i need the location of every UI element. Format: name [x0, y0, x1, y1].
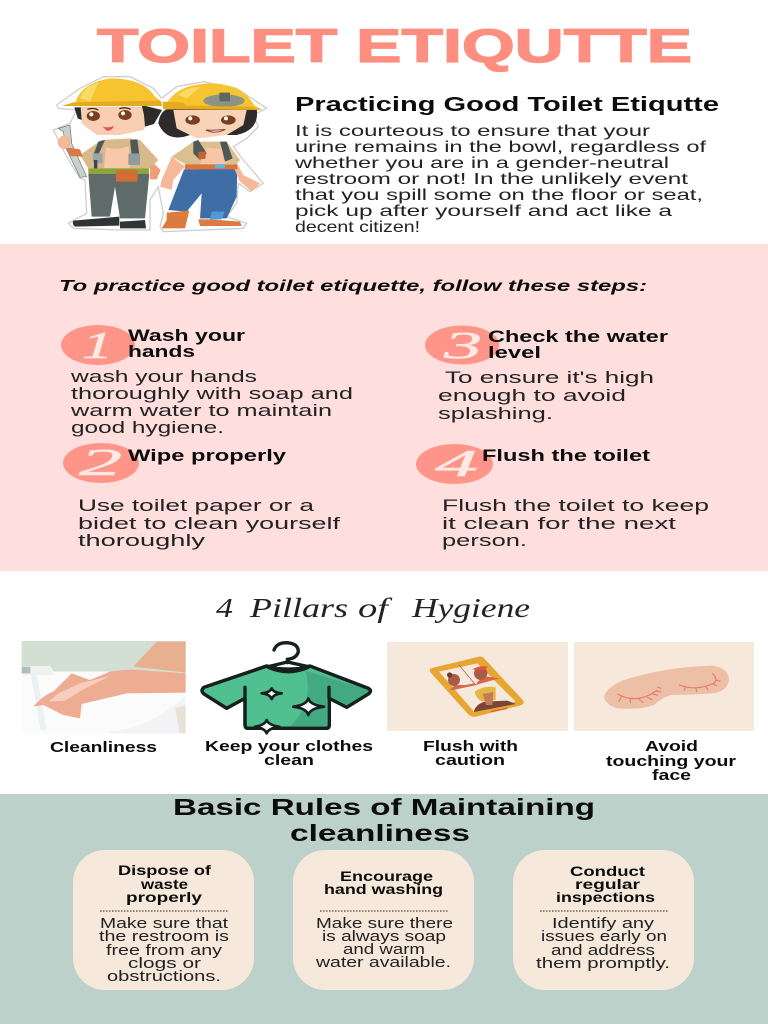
card: conduct regular inspections	[513, 850, 694, 990]
step 4: Flush the toilet to keep	[442, 497, 709, 515]
step 2	[63, 442, 341, 550]
card: dispose of waste: obstructions.	[107, 969, 221, 985]
step 1: good hygiene.	[71, 419, 224, 437]
step 3: To ensure it's high	[445, 369, 654, 387]
card: encourage hand washing: is always soap	[322, 929, 446, 945]
intro paragraph	[294, 123, 707, 236]
step 1: wash your hands	[70, 368, 257, 386]
step 1: thoroughly with soap and	[71, 385, 353, 403]
card: encourage hand washing: Make sure there	[316, 916, 453, 932]
step 4: it clean for the next	[442, 515, 677, 533]
card: encourage hand washing	[293, 850, 474, 990]
step 2: bidet to clean yourself	[78, 515, 341, 533]
step 2: 2	[79, 442, 122, 484]
step 1: 1	[82, 325, 113, 367]
label: avoid touching your face: touching your	[606, 754, 736, 770]
card: dispose of waste: clogs or	[128, 956, 201, 972]
label: keep your clothes clean	[205, 739, 373, 769]
step 3: splashing.	[438, 405, 553, 423]
label: keep your clothes clean: Keep your clothes	[205, 739, 373, 755]
steps heading: To practice good toilet etiquette, follow these steps:	[59, 278, 647, 295]
card: conduct regular inspections: Conduct	[570, 863, 645, 879]
step 1: hands	[128, 343, 195, 361]
step 4: 4	[435, 443, 478, 485]
intro paragraph: It is courteous to ensure that your	[295, 123, 651, 140]
label: avoid touching your face	[606, 739, 736, 784]
icon: two construction worker characters	[53, 77, 267, 232]
intro paragraph: urine remains in the bowl, regardless of	[295, 139, 707, 156]
pillar: cleanliness	[22, 641, 186, 756]
intro paragraph: restroom or not! In the unlikely event	[295, 171, 689, 188]
card: conduct regular inspections: and address	[551, 943, 655, 959]
pillars heading: 4	[216, 593, 233, 623]
label: keep your clothes clean: clean	[264, 753, 314, 769]
card: conduct regular inspections: regular	[575, 876, 641, 892]
card: encourage hand washing: and warm	[343, 942, 425, 958]
step 3: level	[488, 344, 541, 362]
woman character	[158, 83, 262, 228]
card: dispose of waste: Make sure that	[100, 916, 228, 932]
intro paragraph: pick up after yourself and act like a	[295, 203, 672, 220]
intro paragraph: that you spill some on the floor or seat,	[295, 187, 703, 204]
basic rules heading	[173, 794, 595, 846]
label: flush with caution: caution	[435, 753, 505, 769]
label: flush with caution: Flush with	[423, 739, 518, 755]
title: TOILET ETIQUTTE	[97, 19, 692, 72]
man character	[58, 78, 162, 228]
pillars heading: of	[358, 593, 393, 623]
pillar: avoid touching face	[574, 642, 754, 784]
icon: green shirt on hanger	[202, 643, 370, 733]
card: encourage hand washing: Encourage	[340, 868, 433, 884]
step 3	[425, 325, 669, 423]
step 3: Check the water	[488, 328, 669, 346]
label: cleanliness: Cleanliness	[50, 740, 157, 756]
card: dispose of waste	[73, 850, 254, 990]
step 4: person.	[442, 532, 527, 550]
card: conduct regular inspections: issues early on	[541, 929, 667, 945]
panel image: phone with video call	[387, 642, 568, 731]
step 1: warm water to maintain	[69, 402, 332, 420]
step 2: Use toilet paper or a	[78, 497, 315, 515]
card: conduct regular inspections: inspections	[556, 889, 655, 905]
pillars heading	[216, 593, 530, 623]
intro paragraph: decent citizen!	[295, 219, 420, 236]
step 4: Flush the toilet	[482, 447, 651, 465]
intro heading: Practicing Good Toilet Etiqutte	[295, 93, 719, 116]
step 4	[416, 443, 709, 550]
card: dispose of waste: free from any	[106, 943, 223, 959]
step 2: thoroughly	[78, 532, 206, 550]
card: dispose of waste: waste	[140, 876, 188, 892]
pillar: keep clothes clean	[202, 643, 373, 769]
label: flush with caution	[423, 739, 518, 769]
step 1	[61, 325, 353, 437]
pillars heading: Hygiene	[411, 593, 530, 623]
basic rules heading: cleanliness	[290, 820, 470, 846]
basic rules heading: Basic Rules of Maintaining	[173, 794, 595, 820]
card: encourage hand washing: hand washing	[324, 881, 443, 897]
label: avoid touching your face: face	[652, 768, 691, 784]
pillars heading: Pillars	[249, 593, 348, 623]
card: dispose of waste: properly	[126, 889, 202, 905]
card: conduct regular inspections: them promptly.	[536, 956, 670, 972]
panel: basic rules	[0, 794, 768, 1024]
pillar: flush with caution	[387, 642, 568, 769]
label: avoid touching your face: Avoid	[645, 739, 698, 755]
card: dispose of waste: Dispose of	[118, 862, 211, 878]
panel: steps	[0, 244, 768, 571]
card: conduct regular inspections: Identify any	[552, 916, 655, 932]
step 2: Wipe properly	[128, 447, 287, 465]
intro paragraph: whether you are in a gender-neutral	[294, 155, 669, 172]
step 3: enough to avoid	[438, 387, 626, 405]
card: dispose of waste: the restroom is	[99, 929, 229, 945]
photo: hands being washed	[22, 641, 186, 733]
step 1: Wash your	[128, 327, 246, 345]
step 3: 3	[442, 325, 482, 367]
panel image: sleeping eye mask	[574, 642, 754, 731]
card: encourage hand washing: water available.	[315, 955, 451, 971]
